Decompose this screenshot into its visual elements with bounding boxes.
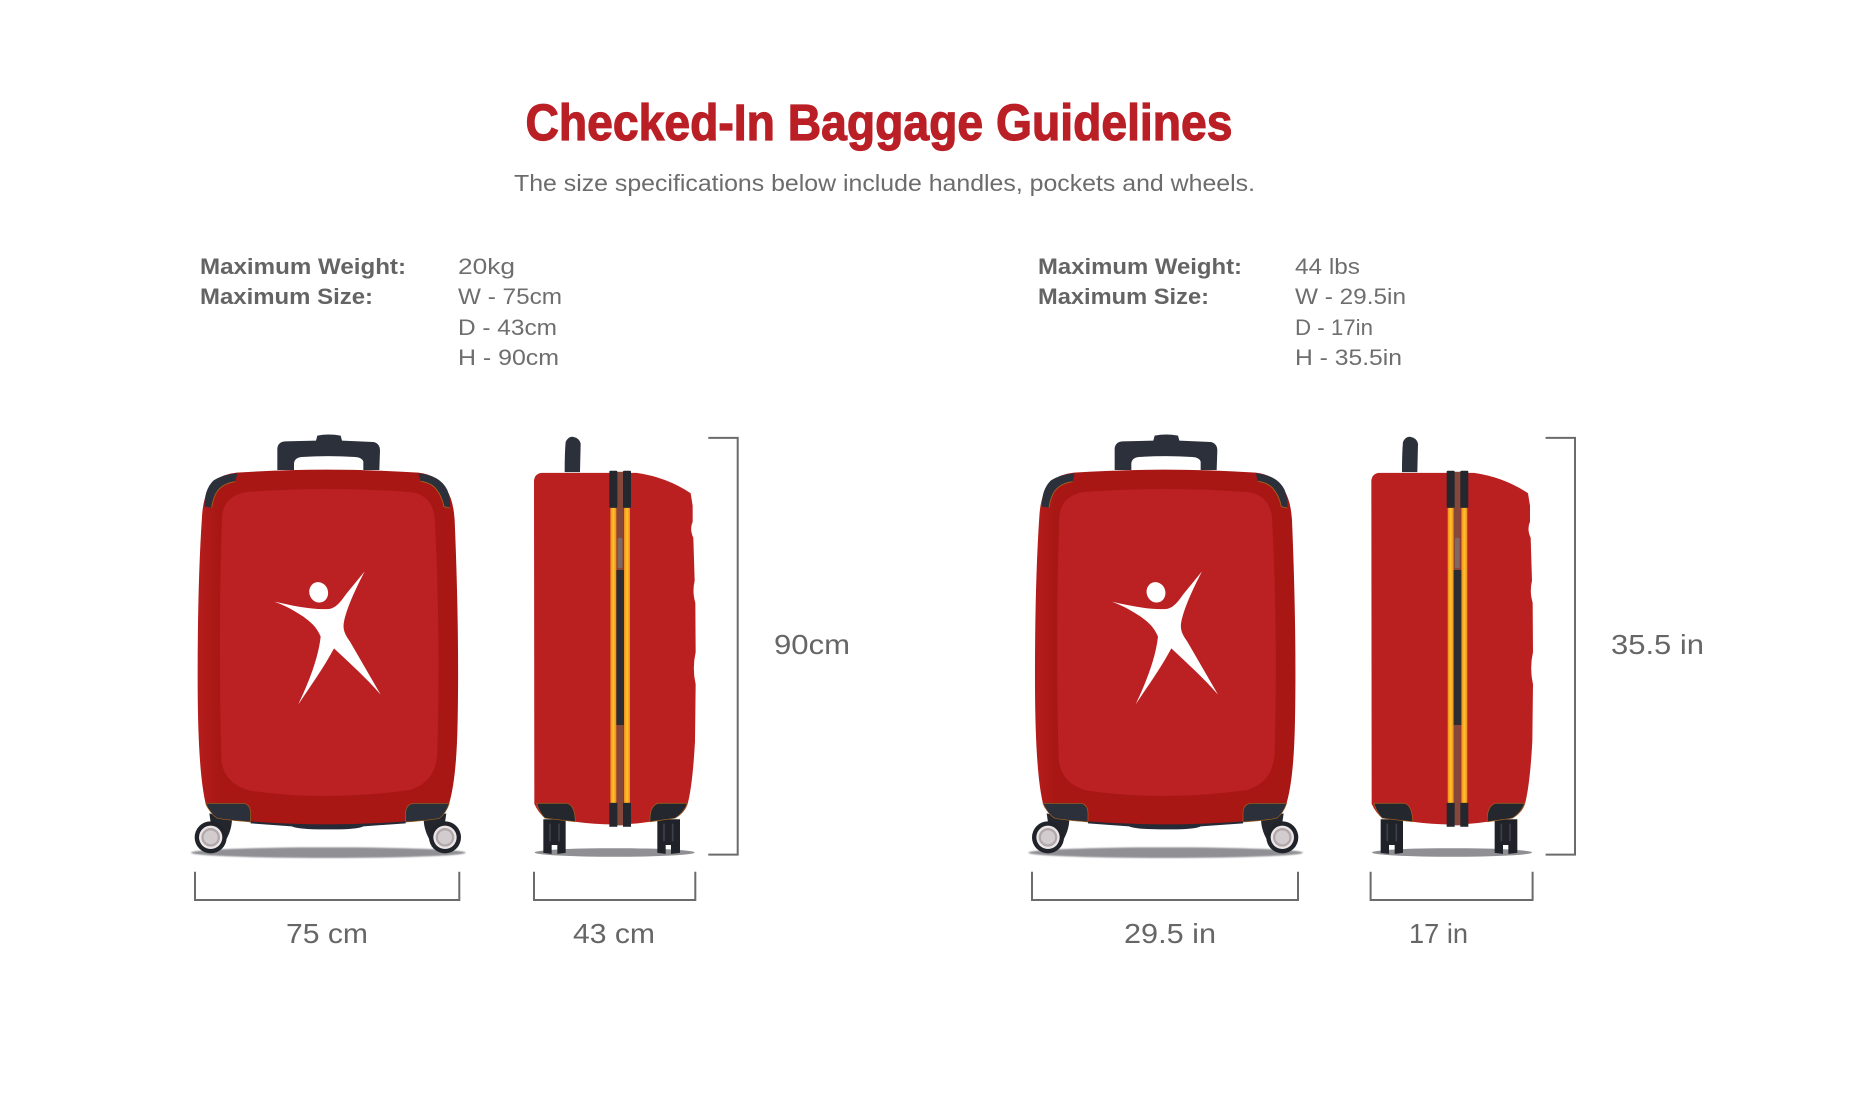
dimension bracket: depth 17 in [1371, 872, 1533, 900]
panel: metric specifications [200, 254, 562, 370]
label: maximum weight: Maximum Weight: [200, 254, 406, 279]
dimension bracket: width 75 cm [195, 872, 459, 900]
title: Checked-In Baggage Guidelines [526, 94, 1232, 151]
subtitle: The size specifications below include handles, pockets and wheels. [514, 170, 1255, 196]
dimension label: 43 cm: 43 cm [573, 918, 655, 949]
suitcase: side view, imperial [1371, 437, 1533, 857]
label: maximum size: Maximum Size: [200, 284, 373, 309]
dimension bracket: width 29.5 in [1032, 872, 1298, 900]
value: height: H - 35.5in [1295, 345, 1402, 370]
suitcase: front view, metric [191, 434, 466, 858]
dimension bracket: depth 43 cm [534, 872, 695, 900]
dimension label: 90cm: 90cm [774, 629, 850, 660]
value: depth: D - 17in [1295, 315, 1373, 340]
suitcase: front view, imperial [1028, 434, 1303, 858]
value: width: W - 29.5in [1295, 284, 1406, 309]
dimension bracket: height 35.5 in [1546, 438, 1575, 855]
dimension bracket: height 90cm [708, 438, 738, 855]
logo: white figure [274, 571, 381, 704]
suitcase: side view, metric [534, 437, 696, 857]
value: depth: D - 43cm [458, 315, 557, 340]
label: maximum size: Maximum Size: [1038, 284, 1209, 309]
dimension label: 35.5 in: 35.5 in [1611, 629, 1704, 660]
value: weight: 44 lbs [1295, 254, 1360, 279]
dimension label: 29.5 in: 29.5 in [1124, 918, 1216, 949]
value: width: W - 75cm [458, 284, 562, 309]
panel: imperial specifications [1038, 254, 1406, 370]
label: maximum weight: Maximum Weight: [1038, 254, 1242, 279]
value: weight: 20kg [458, 254, 515, 279]
dimension label: 75 cm: 75 cm [286, 918, 368, 949]
value: height: H - 90cm [458, 345, 559, 370]
logo: white figure [1112, 571, 1218, 704]
dimension label: 17 in: 17 in [1409, 918, 1468, 949]
